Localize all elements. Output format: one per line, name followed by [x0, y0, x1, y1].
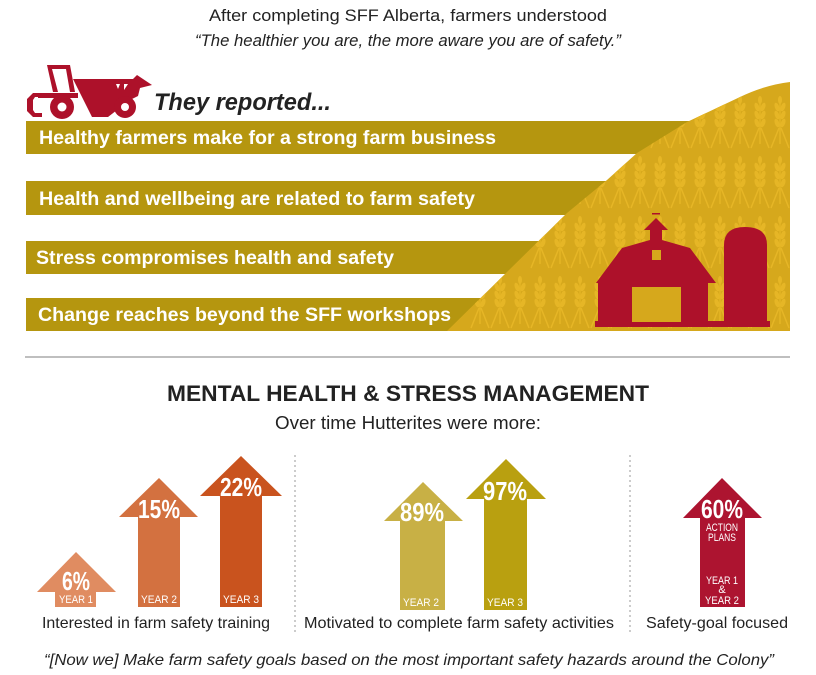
section title: MENTAL HEALTH & STRESS MANAGEMENT — [167, 381, 650, 406]
arrow: motivated year 3 97%: 97% — [483, 476, 527, 506]
arrow: action plans 60%: 60% — [701, 494, 743, 524]
arrow: year 1 6%: 6% — [62, 566, 90, 596]
intro text — [195, 6, 622, 50]
heading: They reported: They reported... — [154, 89, 331, 116]
arrow chart — [37, 456, 762, 610]
arrow: year 3 22%: YEAR 3 — [223, 594, 259, 606]
arrow: motivated year 3 97%: YEAR 3 — [487, 597, 523, 609]
arrow: motivated year 2 89%: YEAR 2 — [403, 597, 439, 609]
captions: Safety-goal focused — [646, 615, 788, 632]
banner: statement 4 — [26, 298, 526, 331]
arrow: year 2 15%: YEAR 2 — [141, 594, 177, 606]
intro text: “The healthier you are, the more aware you are of safety.” — [195, 31, 622, 50]
banner: statement 3 — [26, 241, 586, 274]
arrow: year 1 6% — [37, 552, 116, 607]
quote: “[Now we] Make farm safety goals based on the most important safety hazards around the Colony” — [44, 652, 775, 669]
arrow: action plans 60%: YEAR 2 — [705, 595, 739, 607]
arrow: action plans 60%: PLANS — [708, 532, 736, 544]
arrow: year 1 6%: YEAR 1 — [59, 594, 93, 606]
banner: statement 2 — [26, 181, 646, 215]
subtitle: Over time Hutterites were more: — [275, 413, 541, 433]
intro text: After completing SFF Alberta, farmers understood — [209, 6, 607, 25]
arrow: year 2 15%: 15% — [138, 494, 180, 524]
arrow: motivated year 2 89% — [384, 482, 463, 610]
arrow: motivated year 3 97% — [466, 459, 546, 610]
captions: Interested in farm safety training — [42, 615, 270, 632]
captions: Motivated to complete farm safety activities — [304, 615, 614, 632]
arrow: action plans 60%: ACTION — [706, 522, 738, 534]
arrow: motivated year 2 89%: 89% — [400, 497, 444, 527]
captions — [42, 615, 788, 632]
arrow: year 2 15% — [119, 478, 198, 607]
arrow: year 3 22%: 22% — [220, 472, 262, 502]
banner: statement 2: Health and wellbeing are related to farm safety — [39, 189, 475, 210]
banner: statement 1 — [26, 121, 706, 154]
icon: combine harvester — [27, 65, 152, 119]
arrow: year 3 22% — [200, 456, 282, 607]
arrow: action plans 60%: & — [718, 584, 726, 596]
banner: statement 4: Change reaches beyond the SFF workshops — [38, 305, 451, 326]
banner: statement 3: Stress compromises health and safety — [36, 248, 394, 269]
arrow: action plans 60% — [683, 478, 762, 607]
icon: barn and silo — [595, 213, 770, 327]
banner: statement 1: Healthy farmers make for a strong farm business — [39, 128, 496, 149]
wheat field illustration — [447, 82, 790, 331]
arrow: action plans 60%: YEAR 1 — [706, 575, 738, 587]
